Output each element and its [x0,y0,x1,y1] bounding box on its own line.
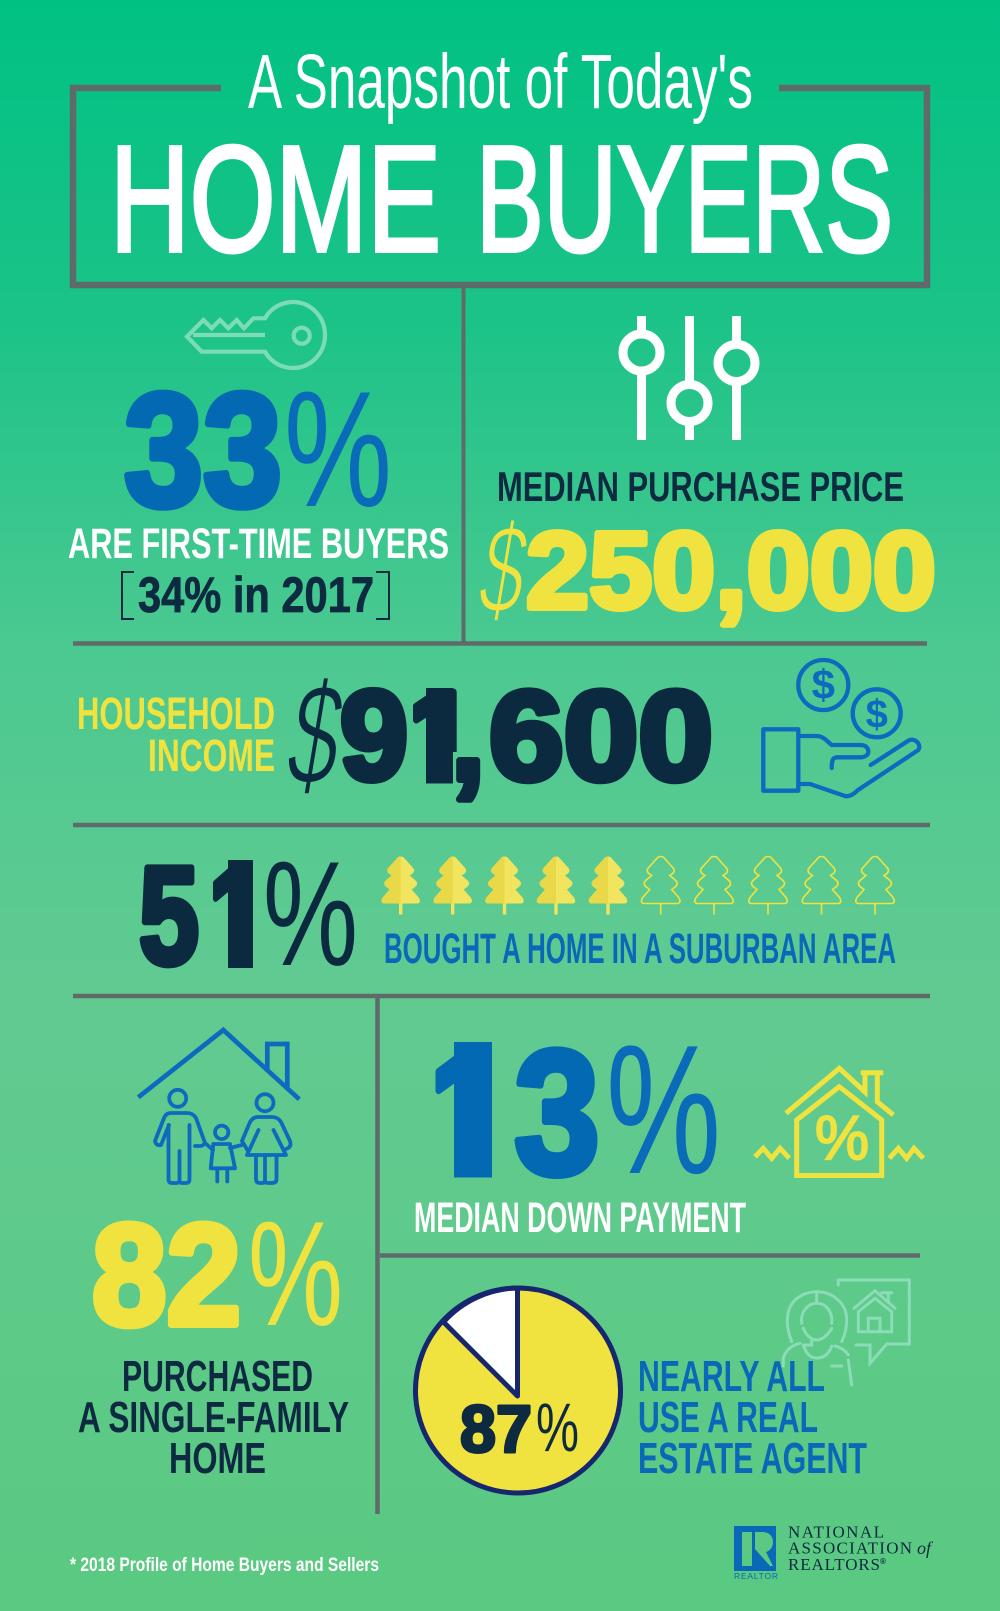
title frame [73,88,927,285]
stat: 51: 5 [139,838,199,994]
icon: family under roof [138,1030,299,1183]
panel: median down payment [414,1006,923,1242]
label: median down payment: MEDIAN DOWN PAYMENT [414,1194,746,1242]
stat: 91,600: , [451,664,485,806]
stat: 13 [428,1014,600,1212]
title: A Snapshot of Today's: A Snapshot of Today's [248,39,753,125]
brackets [122,572,389,619]
stat: percent sign: % [248,1190,343,1357]
label: nearly all: NEARLY ALL [638,1352,825,1401]
label: a single-family: A SINGLE-FAMILY [78,1393,349,1442]
stat: 82: 82 [92,1194,241,1356]
pie value: percent sign: % [536,1389,579,1466]
organisation name: of: of [917,1538,934,1558]
stat: 13: 1 [428,1014,514,1212]
title: HOME BUYERS [110,114,893,283]
dollar sign: $ [278,653,355,815]
label: household: HOUSEHOLD [77,688,275,739]
stat: 51: 1 [208,838,266,994]
icon: filled trees [381,856,627,914]
panel: household income [77,653,919,815]
label: income: INCOME [148,730,275,781]
chart: 87% pie [416,1288,620,1493]
title: HOME BUYERS: HOME [110,114,441,283]
stat: 33: 33 [124,360,282,540]
stat: 250,000: 250,000 [526,510,936,632]
registered mark: ® [880,1557,886,1566]
icon: house with percent [755,1068,923,1176]
stat: 91,600: 91 [340,664,476,806]
realtor wordmark: REALTOR [734,1571,778,1581]
logo: National Association of Realtors [734,1522,934,1581]
stat: 91,600: 600 [489,664,713,806]
label: home: HOME [169,1434,266,1483]
stat: 51 [139,838,269,994]
panel: first-time buyers [68,302,449,623]
footnote: * 2018 Profile of Home Buyers and Sellers [70,1555,379,1576]
label: 34% in 2017: 34% in 2017 [138,567,374,623]
icon: outline trees [641,856,894,914]
icon: hand with coins: $ [812,661,835,708]
icon: house with percent: % [815,1104,869,1173]
pie value: 87: 87 [460,1392,532,1467]
label: are first-time buyers: ARE FIRST-TIME BUYERS [68,520,449,568]
panel: suburban area [139,830,896,997]
stat: 13: 3 [514,1014,600,1212]
panel: single-family home [78,1030,349,1483]
panel: median purchase price [470,316,936,641]
panel: real estate agent [416,1280,909,1493]
icon: key [187,302,325,368]
stat: percent sign: % [284,357,392,541]
label: use a real: USE A REAL [638,1393,818,1442]
icon: sliders [623,316,755,440]
icon: agent with speech bubble [783,1280,909,1385]
organisation name: NATIONAL [788,1522,884,1542]
icon: hand with coins: $ [866,692,888,736]
stat: 91,600 [340,664,713,806]
label: purchased: PURCHASED [122,1352,313,1401]
dollar sign: $ [470,499,538,641]
icon: hand with coins [763,660,919,796]
icon: realtor R block [734,1526,776,1571]
label: estate agent: ESTATE AGENT [638,1434,867,1483]
stat: percent sign: % [606,1006,721,1212]
organisation name line 2: ASSOCIATION [788,1538,912,1558]
stat: percent sign: % [263,830,358,997]
organisation name line 3: REALTORS [788,1555,880,1574]
